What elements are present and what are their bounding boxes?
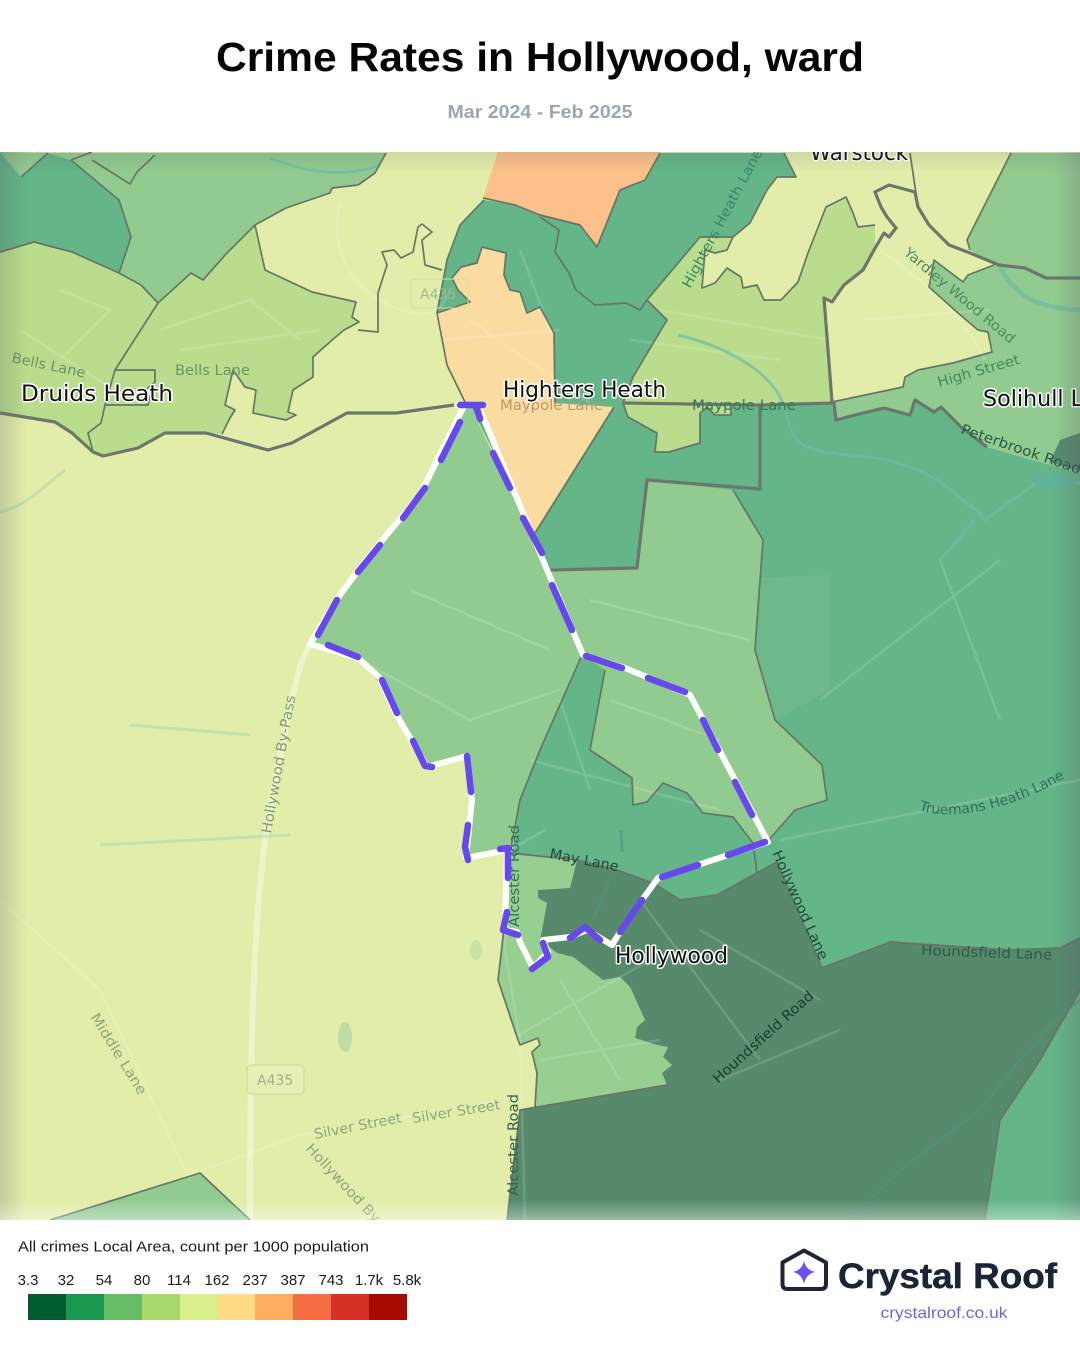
label: Maypole Lane east: Maypole Lane <box>692 398 796 414</box>
label: Highters Heath: Highters Heath <box>503 378 666 403</box>
legend tick labels: 32 <box>58 1272 74 1289</box>
label: Druids Heath: Druids Heath <box>21 382 173 407</box>
area: north orange <box>483 152 660 247</box>
area: north-west dark green <box>0 152 131 273</box>
subtitle: date range: Mar 2024 - Feb 2025 <box>448 102 632 122</box>
legend tick labels: 3.3 <box>18 1272 38 1289</box>
label: A435 north badge <box>411 279 468 308</box>
label: A435 south badge: A435 <box>257 1073 293 1089</box>
ward outline: purple dashes <box>318 405 765 969</box>
label: May Lane: May Lane <box>548 846 620 875</box>
area: west light green <box>0 225 359 456</box>
legend title: All crimes Local Area, count per 1000 population <box>18 1238 369 1256</box>
area: south darkest green <box>507 860 1080 1220</box>
ward outline: white base <box>310 405 768 968</box>
label: Alcester Road north: Alcester Road <box>507 825 523 927</box>
area: central-north dark green <box>437 153 796 570</box>
legend tick labels: 80 <box>134 1272 150 1289</box>
label: Houndsfield Lane: Houndsfield Lane <box>921 943 1052 964</box>
legend <box>18 1238 422 1320</box>
legend colour scale <box>28 1294 407 1320</box>
area: north-west medium green <box>48 153 386 303</box>
label: Hollywood By-Pass south: Hollywood By-Pass <box>302 1141 409 1254</box>
label: Yardley Wood Road: Yardley Wood Road <box>900 244 1018 347</box>
label: Silver Street east: Silver Street <box>411 1097 502 1127</box>
label: Hollywood: Hollywood <box>615 944 728 969</box>
legend tick labels <box>18 1272 422 1289</box>
area: north-east medium green <box>832 153 1080 473</box>
label: Truemans Heath Lane: Truemans Heath Lane <box>921 772 1064 814</box>
label: Solihull Lodge: Solihull L <box>983 387 1080 412</box>
thick ward boundary lines <box>0 185 1080 570</box>
label: Hollywood By-Pass: Hollywood By-Pass <box>259 694 299 835</box>
logo wordmark: Crystal Roof <box>838 1257 1057 1296</box>
label: A435 north badge: A435 <box>420 287 456 303</box>
area: Hollywood ward west medium green <box>312 405 582 858</box>
logo url: crystalroof.co.uk <box>880 1305 1009 1322</box>
label: High Street: High Street <box>936 352 1022 391</box>
label: Peterbrook Road: Peterbrook Road <box>959 422 1080 478</box>
legend tick labels: 162 <box>204 1272 230 1289</box>
title: Crime Rates in Hollywood, ward <box>216 34 864 80</box>
label: A435 south badge <box>247 1065 304 1094</box>
icon: lakes <box>338 474 1077 1052</box>
label: Bells Lane west: Bells Lane <box>10 350 87 382</box>
legend tick labels: 1.7k <box>355 1272 384 1289</box>
label: Bells Lane east: Bells Lane <box>175 363 250 379</box>
area: Highters Heath light orange <box>437 247 614 533</box>
label: Highters Heath Lane: Highters Heath Lane <box>679 147 766 291</box>
area: south-east dark green <box>985 985 1080 1220</box>
legend tick labels: 237 <box>242 1272 268 1289</box>
label: Warstock: Warstock <box>810 141 908 166</box>
label: Silver Street west: Silver Street <box>313 1110 404 1143</box>
legend tick labels: 54 <box>96 1272 112 1289</box>
area boundary lines <box>0 152 1080 1220</box>
area: darker patch <box>755 575 830 720</box>
area: east edge darkest patch <box>1050 433 1080 472</box>
area: north-west top-left corner <box>0 152 48 177</box>
legend tick labels: 743 <box>318 1272 344 1289</box>
label: Houndsfield Road: Houndsfield Road <box>710 988 817 1087</box>
logo: Crystal Roof <box>782 1250 1057 1322</box>
area: east dark green <box>512 400 1080 1000</box>
roads and streams <box>0 205 1080 1220</box>
area: south medium green <box>498 853 672 1108</box>
area: south-west medium green <box>50 1173 250 1220</box>
legend tick labels: 114 <box>167 1272 191 1289</box>
label: Alcester Road south: Alcester Road <box>506 1094 522 1196</box>
area: Maypole light green <box>623 197 875 452</box>
label: Maypole Lane west: Maypole Lane <box>500 398 603 414</box>
area: central-east medium green <box>545 480 827 843</box>
icon: house with star <box>782 1250 826 1289</box>
label: Hollywood Lane: Hollywood Lane <box>768 848 831 962</box>
legend tick labels: 5.8k <box>393 1272 422 1289</box>
legend tick labels: 387 <box>280 1272 306 1289</box>
label: Middle Lane: Middle Lane <box>87 1011 149 1098</box>
